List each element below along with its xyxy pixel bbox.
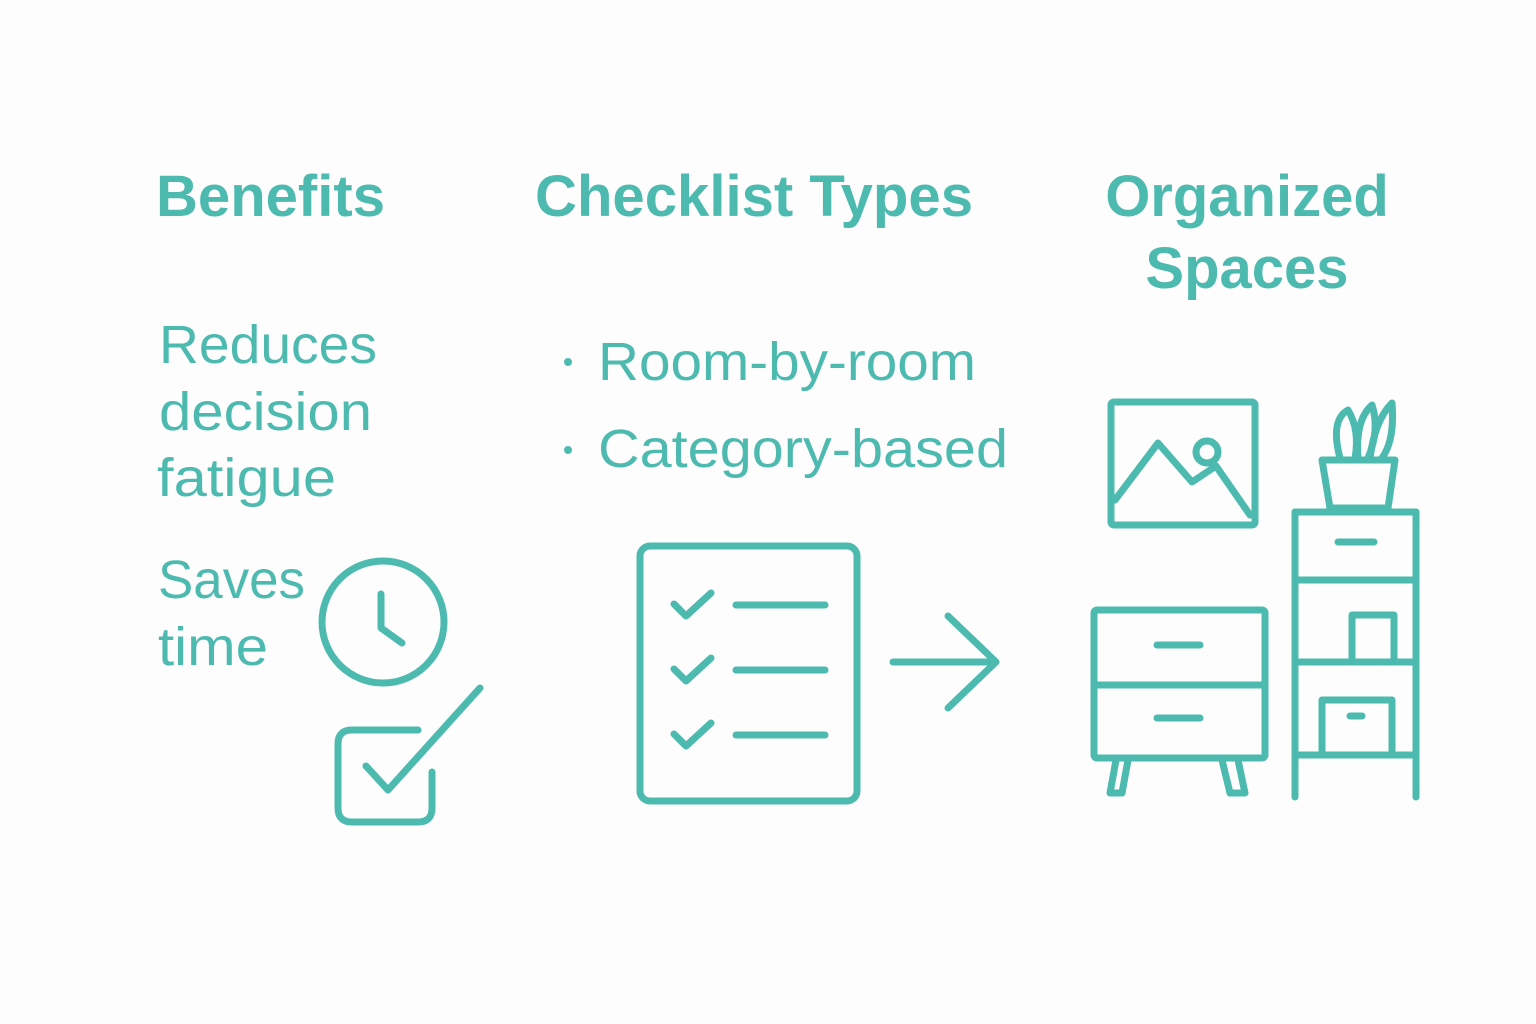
heading: organized spaces: Organized	[1105, 164, 1389, 229]
bullet list: checklist types	[564, 332, 1008, 479]
text: reduces decision fatigue: decision	[159, 382, 372, 442]
heading: organized spaces: Spaces	[1145, 236, 1349, 301]
text: saves time: time	[158, 617, 268, 677]
text: reduces decision fatigue	[157, 315, 377, 508]
bullet list: checklist types: Room-by-room	[598, 332, 976, 392]
icon: dresser	[1094, 610, 1265, 793]
text: saves time: Saves	[158, 550, 305, 610]
heading: checklist types: Checklist Types	[535, 164, 973, 229]
heading: benefits: Benefits	[156, 164, 385, 229]
icon: shelf with plant	[1295, 403, 1416, 797]
text: reduces decision fatigue: Reduces	[159, 315, 377, 375]
icon: clock	[322, 561, 444, 683]
icon: checkbox with check	[338, 688, 480, 822]
icon: checklist document	[640, 546, 857, 801]
arrow	[893, 616, 996, 708]
heading: organized spaces	[1105, 164, 1389, 301]
icon: picture frame	[1111, 402, 1255, 525]
bullet list: checklist types: Category-based	[598, 419, 1008, 479]
text: reduces decision fatigue: fatigue	[157, 448, 336, 508]
text: saves time	[158, 550, 305, 677]
